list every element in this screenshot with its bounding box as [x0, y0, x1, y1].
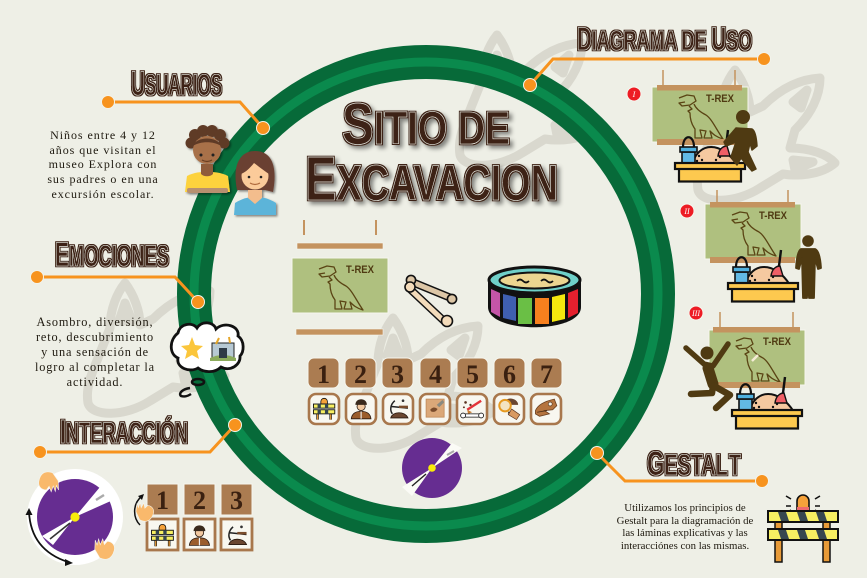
icon tiles 1 to 3	[147, 519, 252, 550]
icon: boy	[185, 125, 230, 193]
central poster	[292, 220, 388, 335]
icon: thought cloud	[171, 323, 243, 396]
heading: interaccion: INTERACCIÓN	[60, 413, 188, 450]
text: usuarios description: museo Explora con	[49, 157, 157, 171]
interactive spinner with hands	[26, 469, 123, 566]
connector: emociones	[30, 270, 204, 308]
step 3 scene	[686, 306, 805, 428]
badge: step 3: III	[691, 309, 700, 318]
text: usuarios description: excursión escolar.	[51, 187, 155, 201]
number tiles 1 to 3: 1	[156, 486, 169, 515]
number tiles 1 to 7: 7	[540, 360, 553, 389]
section: usuarios	[47, 65, 276, 215]
number tiles 1 to 7: 4	[429, 360, 442, 389]
section: gestalt	[590, 445, 838, 562]
poster: step 2: T-REX	[759, 210, 788, 222]
badge: step 2: II	[683, 207, 690, 216]
connector: gestalt	[590, 446, 768, 488]
icon: sandbox 1	[675, 130, 745, 182]
green ring	[194, 62, 658, 526]
section: emociones	[30, 236, 243, 396]
icon: rainbow drum	[488, 267, 581, 327]
connector: diagrama de uso	[524, 52, 770, 92]
text: emociones description: reto, descubrimiento	[36, 330, 154, 344]
text: gestalt description: Utilizamos los principios de	[624, 502, 746, 514]
text: usuarios description: Niños entre 4 y 12	[50, 128, 156, 142]
icon: girl	[234, 151, 276, 215]
icon: barricade with beacon	[768, 495, 838, 562]
number tiles 1 to 3: 2	[193, 486, 206, 515]
text: emociones description: Asombro, diversión,	[37, 315, 153, 329]
step 1 scene	[627, 70, 757, 182]
text: gestalt description: las láminas explicativas y las	[622, 527, 748, 539]
icon: sandbox 3	[732, 377, 802, 428]
heading: emociones: EMOCIONES	[55, 236, 169, 274]
heading: usuarios: USUARIOS	[131, 65, 222, 103]
title: SITIO DE	[342, 92, 510, 157]
title	[305, 92, 558, 214]
icon: sandbox 2	[728, 250, 798, 302]
text: gestalt description: interacciónes con las mismas.	[621, 540, 749, 552]
connector: interaccion	[34, 418, 242, 458]
number tiles 1 to 7: 6	[503, 360, 516, 389]
icon tiles row	[309, 394, 561, 424]
title: EXCAVACION	[305, 145, 558, 214]
step 2 scene	[680, 190, 821, 302]
number tiles 1 to 7: 1	[317, 360, 330, 389]
text: usuarios description: sus padres o en una	[47, 172, 159, 186]
central purple spinner	[402, 438, 462, 498]
number tiles 1 to 3	[147, 484, 252, 515]
icon: crossed bones	[405, 275, 457, 326]
text: gestalt description: Gestalt para la diagramación de	[617, 515, 754, 527]
number tiles 1 to 7: 2	[354, 360, 367, 389]
poster: step 3: T-REX	[763, 336, 792, 348]
number tiles 1 to 7: 3	[391, 360, 404, 389]
figure: person jumping	[686, 344, 730, 408]
section: diagrama de uso	[524, 21, 821, 428]
text: usuarios description: años que visitan el	[49, 143, 157, 157]
section: interaccion	[26, 413, 252, 566]
figure: person digging	[724, 110, 757, 171]
heading: gestalt: GESTALT	[647, 445, 741, 483]
poster: step 1: T-REX	[706, 93, 735, 105]
poster: step 2	[705, 202, 801, 263]
number tiles 1 to 7	[308, 358, 562, 389]
text: emociones description: y una sensación de	[41, 345, 149, 359]
icon: hand swiping tile	[132, 494, 156, 525]
heading: diagrama de uso: DIAGRAMA DE USO	[577, 21, 752, 57]
background dinosaur footprints	[87, 35, 835, 448]
number tiles 1 to 7: 5	[466, 360, 479, 389]
figure: person standing with bone	[796, 235, 821, 298]
number tiles 1 to 3: 3	[230, 486, 243, 515]
text: emociones description: logro al completar la	[35, 360, 155, 374]
text: emociones description: actividad.	[67, 375, 123, 389]
central poster: T-REX	[346, 264, 375, 276]
badge: step 2	[680, 204, 694, 218]
badge: step 1: I	[632, 90, 636, 99]
connector: usuarios	[102, 96, 270, 134]
